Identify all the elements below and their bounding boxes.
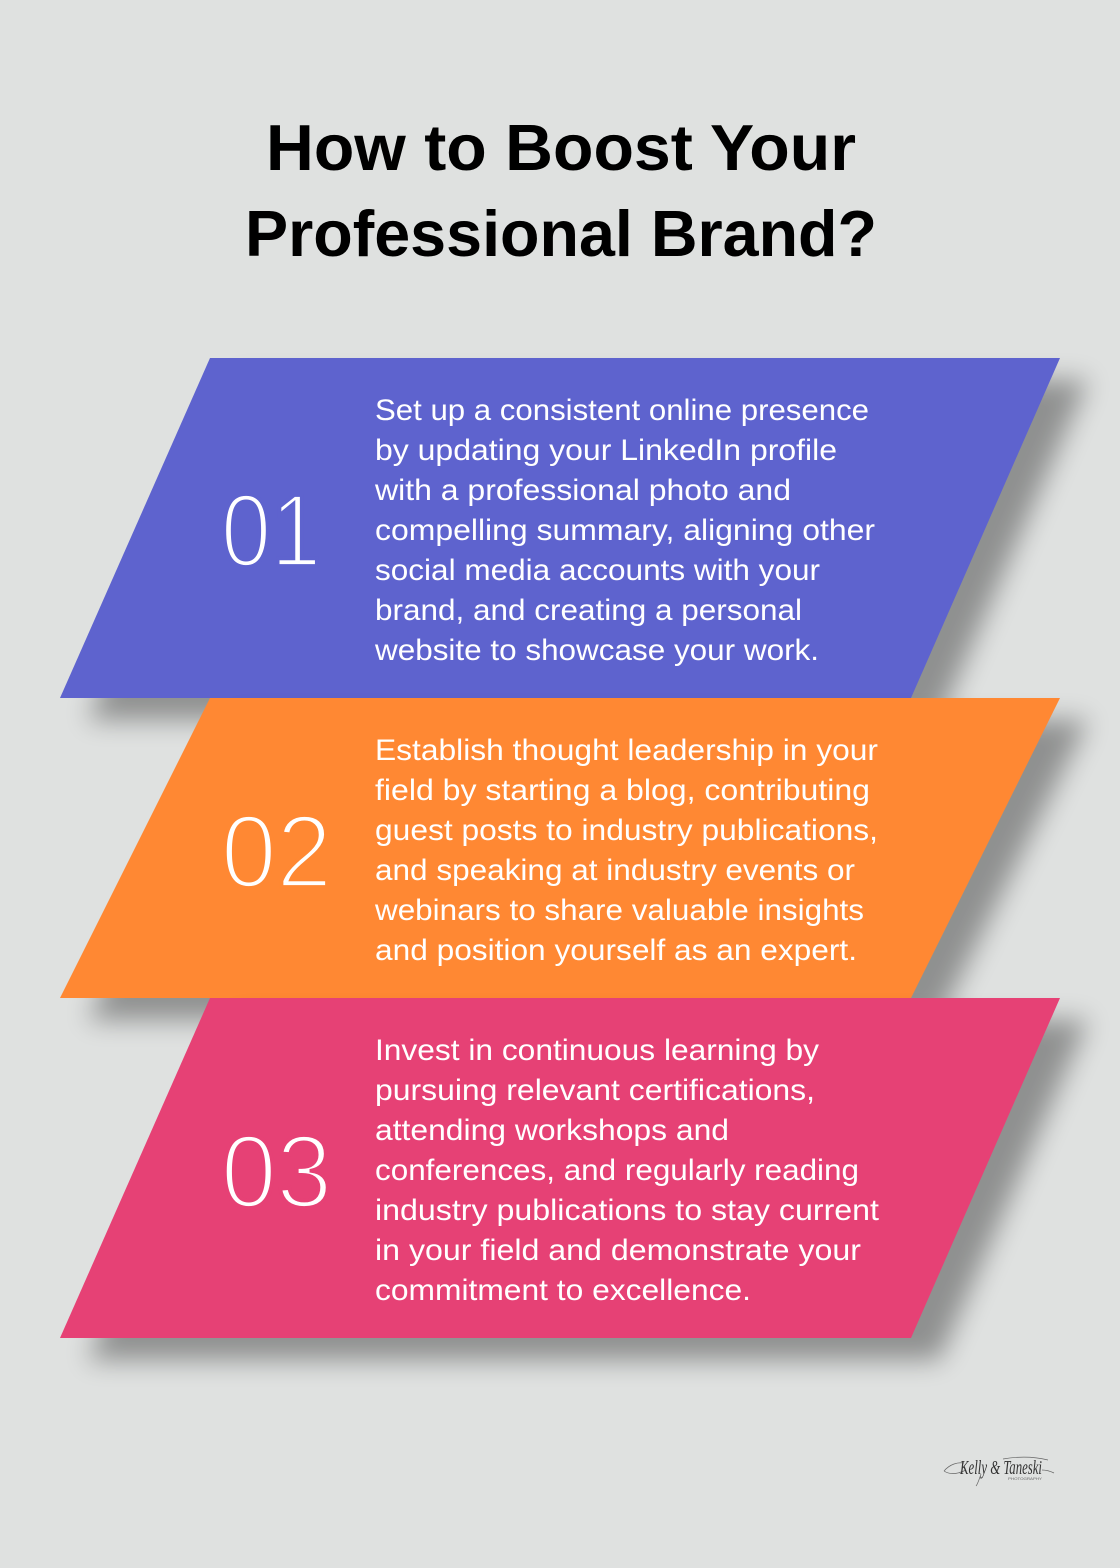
number 02: 02 xyxy=(221,794,332,909)
text: step 01 description: Set up a consistent online presence xyxy=(375,394,869,427)
text: step 01 description: brand, and creating a personal xyxy=(375,594,802,627)
text: step 01 description: with a professional photo and xyxy=(374,474,791,507)
text: step 03 description: pursuing relevant certifications, xyxy=(375,1074,815,1107)
text: step 02 description: webinars to share valuable insights xyxy=(374,894,864,927)
logo: photographer signature: PHOTOGRAPHY xyxy=(1008,1477,1043,1481)
text: step 03 description: commitment to excellence. xyxy=(375,1274,751,1307)
text: step 01 description: website to showcase your work. xyxy=(374,634,819,667)
panel: step 02 xyxy=(60,698,1060,998)
text: step 03 description: Invest in continuous learning by xyxy=(375,1034,819,1067)
text: step 01 description: by updating your LinkedIn profile xyxy=(375,434,837,467)
text: step 03 description: attending workshops and xyxy=(375,1114,729,1147)
text: step 02 description: and speaking at industry events or xyxy=(375,854,855,887)
text: step 03 description xyxy=(375,1034,880,1307)
logo: photographer signature: Kelly & Taneski xyxy=(959,1457,1042,1479)
text: step 02 description: and position yourself as an expert. xyxy=(375,934,857,967)
orange parallelogram xyxy=(60,698,1060,998)
text: step 01 description: compelling summary, aligning other xyxy=(375,514,875,547)
number 03: 03 xyxy=(221,1114,332,1229)
number 01: 01 xyxy=(221,473,321,588)
text: step 01 description: social media accounts with your xyxy=(375,554,820,587)
text: step 02 description: field by starting a blog, contributing xyxy=(375,774,870,807)
text: step 02 description xyxy=(374,734,878,967)
text: step 03 description: in your field and demonstrate your xyxy=(375,1234,861,1267)
text: step 03 description: industry publications to stay current xyxy=(375,1194,880,1227)
text: step 02 description: Establish thought leadership in your xyxy=(375,734,878,767)
panel: step 01 xyxy=(60,358,1060,698)
blue parallelogram xyxy=(60,358,1060,698)
text: step 01 description xyxy=(374,394,875,667)
text: step 02 description: guest posts to industry publications, xyxy=(375,814,878,847)
title: How to Boost Your xyxy=(266,111,856,184)
panel: step 03 xyxy=(60,998,1060,1338)
title xyxy=(245,111,877,270)
logo: photographer signature xyxy=(944,1457,1054,1486)
pink parallelogram xyxy=(60,998,1060,1338)
title: Professional Brand? xyxy=(245,197,877,270)
text: step 03 description: conferences, and regularly reading xyxy=(375,1154,859,1187)
